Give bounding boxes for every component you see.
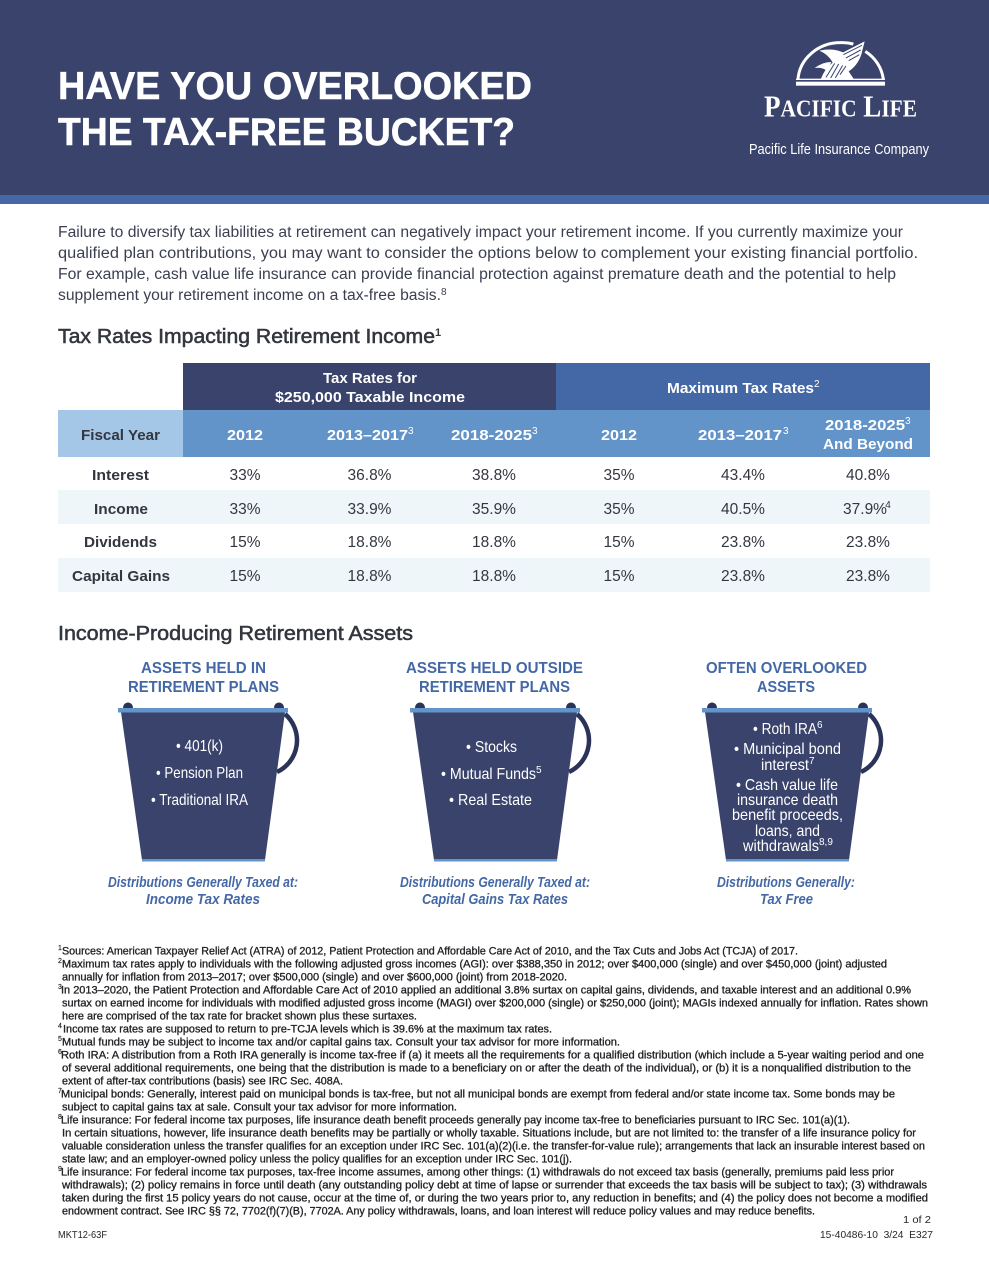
heading: tax rates: 1 (435, 327, 441, 339)
table header: maximum tax rates: Maximum Tax Rates (667, 380, 814, 397)
panel heading (128, 660, 279, 696)
table header: fiscal years (58, 410, 930, 457)
tax treatment caption (108, 874, 298, 908)
row: interest (92, 467, 890, 484)
bucket list: • Pension Plan (156, 765, 243, 782)
row: income: Income (94, 501, 148, 518)
footnotes: surtax on earned income for individuals with modified adjusted gross income (MAGI) over $200,000 (single) or $250,000 (joint); MAGIs indexed annually for inflation. Rates shown (62, 998, 928, 1010)
row: dividends (84, 534, 890, 551)
table header: fiscal years: 2013–2017 (698, 427, 782, 444)
row: dividends: 18.8% (472, 534, 516, 551)
title: THE TAX-FREE BUCKET? (58, 111, 515, 154)
heading: retirement assets: Income-Producing Retirement Assets (58, 623, 413, 645)
icon: bucket (410, 702, 589, 862)
footnotes: 2 (58, 958, 62, 965)
row: income: 40.5% (721, 501, 765, 518)
company name: Pacific Life Insurance Company (749, 142, 930, 158)
intro paragraph: For example, cash value life insurance can provide financial protection against premature death and the potential to help (58, 266, 896, 283)
footnotes: In 2013–2020, the Patient Protection and Affordable Care Act of 2010 applied an additional 3.8% surtax on capital gains, dividends, and taxable interest and an additional 0.9% (61, 984, 912, 996)
table header: fiscal years: 2013–2017 (327, 427, 408, 444)
row: capital gains: Capital Gains (72, 568, 170, 585)
panel heading: ASSETS (757, 679, 815, 696)
row: interest: 33% (229, 467, 261, 484)
footnotes: 8 (58, 1114, 62, 1121)
row: interest: 35% (603, 467, 635, 484)
bucket list: withdrawals (742, 838, 819, 855)
document code: MKT12-63F (58, 1229, 107, 1241)
footnotes: state law; and an employer-owned policy unless the policy qualifies for an exception under IRC Sec. 101(j). (62, 1154, 572, 1166)
row: income (58, 490, 930, 524)
row: income: 35.9% (472, 501, 516, 518)
heading: tax rates: Tax Rates Impacting Retirement Income (58, 326, 435, 348)
footnotes: of several additional requirements, one being that the distribution is made to a beneficiary on or after the death of the individual), or (b) it is a nonqualified distribution to the (62, 1062, 911, 1074)
tax treatment caption: Tax Free (760, 891, 813, 908)
table header: fiscal years: 2018-2025 (451, 427, 532, 444)
footnotes: 6 (58, 1049, 62, 1056)
intro paragraph: Failure to diversify tax liabilities at retirement can negatively impact your retirement income. If you currently maximize your (58, 224, 903, 241)
row: dividends: 23.8% (846, 534, 890, 551)
panel heading (406, 660, 583, 696)
intro paragraph: qualified plan contributions, you may want to consider the options below to complement your existing financial portfolio. (58, 245, 918, 262)
table header: fiscal years: 2012 (227, 427, 263, 444)
footnotes: Maximum tax rates apply to individuals with the following adjusted gross incomes (AGI): over $388,350 in 2012; over $400,000 (single) and over $450,000 (joint) adjusted (62, 958, 887, 970)
table header: fiscal years: Fiscal Year (81, 427, 160, 444)
panel heading: RETIREMENT PLANS (128, 679, 279, 696)
bucket list: interest (761, 757, 810, 774)
row: capital gains: 18.8% (472, 568, 516, 585)
bucket list (441, 739, 542, 809)
row: dividends: Dividends (84, 534, 157, 551)
bucket list: 7 (809, 756, 815, 767)
footnotes: 7 (58, 1088, 62, 1095)
bucket list: • Traditional IRA (151, 792, 248, 809)
bucket list: • Municipal bond (734, 741, 841, 758)
intro paragraph: supplement your retirement income on a tax-free basis. (58, 287, 441, 304)
row: income: 33% (229, 501, 261, 518)
table header: maximum tax rates: 2 (814, 379, 820, 390)
footnotes: annually for inflation from 2013–2017; over $500,000 (single) and over $600,000 (joint) from 2018-2020. (62, 972, 567, 984)
footnotes: Municipal bonds: Generally, interest paid on municipal bonds is tax-free, but not all municipal bonds are exempt from federal and/or state income tax. Some bonds may be (61, 1088, 895, 1100)
row: dividends: 23.8% (721, 534, 765, 551)
bucket list: • Stocks (466, 739, 517, 756)
footnotes: 4 (58, 1023, 62, 1030)
footnotes: here are comprised of the tax rate for bracket shown plus these surtaxes. (62, 1010, 417, 1022)
table header: fiscal years: 3 (532, 426, 538, 437)
row: interest: 43.4% (721, 467, 765, 484)
row: interest: Interest (92, 467, 149, 484)
row: capital gains (58, 558, 930, 592)
row: capital gains: 15% (603, 568, 635, 585)
row: income: 35% (603, 501, 635, 518)
table header: tax rates for $250,000: $250,000 Taxable Income (275, 389, 465, 406)
footnotes: Life insurance: For federal income tax purposes, life insurance death benefit proceeds generally pay income tax-free to beneficiaries pursuant to IRC Sec. 101(a)(1). (61, 1114, 850, 1126)
bucket list: insurance death (737, 792, 838, 809)
form number: 15-40486-10 3/24 E327 (820, 1229, 933, 1241)
footnotes: Life insurance: For federal income tax purposes, tax-free income assumes, among other things: (1) withdrawals do not exceed tax basis (generally, premiums paid less prior (61, 1166, 894, 1178)
bucket list: • 401(k) (176, 738, 223, 755)
footnotes (58, 945, 928, 1218)
footnotes: Income tax rates are supposed to return to pre-TCJA levels which is 39.6% at the maximum tax rates. (63, 1024, 552, 1036)
panel heading (706, 660, 867, 696)
row: capital gains: 23.8% (721, 568, 765, 585)
row: income: 37.9% (843, 501, 887, 518)
tax treatment caption: Distributions Generally: (717, 874, 855, 891)
header banner (0, 0, 989, 204)
footnotes: extent of after-tax contributions (basis) see IRC Sec. 408A. (62, 1076, 343, 1088)
row: interest: 40.8% (846, 467, 890, 484)
footnotes: taken during the first 15 policy years do not cause, occur at the time of, or during the two years prior to, any reduction in benefits; and (4) the policy does not become a modified (62, 1192, 928, 1204)
tax treatment caption: Capital Gains Tax Rates (422, 891, 568, 908)
panel heading: ASSETS HELD IN (141, 660, 266, 677)
footnotes: withdrawals); (2) policy remains in force until death (any outstanding policy debt at time of lapse or surrender that exceeds the tax basis will be subject to tax); (3) withdrawals (61, 1180, 927, 1192)
logo: Pacific Life whale (764, 41, 917, 124)
footnotes: Sources: American Taxpayer Relief Act (ATRA) of 2012, Patient Protection and Affordable Care Act of 2010, and the Tax Cuts and Jobs Act (TCJA) of 2017. (62, 946, 798, 958)
panel heading: OFTEN OVERLOOKED (706, 660, 867, 677)
table header: fiscal years: 2012 (601, 427, 637, 444)
row: capital gains: 15% (229, 568, 261, 585)
table header: tax rates for $250,000 (183, 363, 556, 410)
footnotes: 9 (58, 1166, 62, 1173)
table header: fiscal years: 3 (408, 426, 414, 437)
bucket list: • Roth IRA (753, 721, 817, 738)
footnotes: Mutual funds may be subject to income tax and/or capital gains tax. Consult your tax advisor for more information. (62, 1036, 620, 1048)
page number: 1 of 2 (903, 1214, 931, 1226)
bucket list: • Cash value life (736, 777, 838, 794)
bucket list: • Mutual Funds (441, 766, 536, 783)
table header: fiscal years: And Beyond (823, 436, 913, 453)
table header: fiscal years: 3 (783, 426, 789, 437)
logo: Pacific Life whale: PACIFIC LIFE (764, 88, 917, 124)
intro paragraph (58, 224, 918, 304)
row: interest: 36.8% (348, 467, 392, 484)
table header: fiscal years: 3 (905, 416, 911, 427)
tax treatment caption: Distributions Generally Taxed at: (108, 874, 298, 891)
bucket list: • Real Estate (449, 792, 532, 809)
row: capital gains: 23.8% (846, 568, 890, 585)
bucket list (151, 738, 248, 809)
bucket list: benefit proceeds, (732, 807, 843, 824)
tax treatment caption (717, 874, 855, 908)
panel heading: ASSETS HELD OUTSIDE (406, 660, 583, 677)
row: income: 33.9% (348, 501, 392, 518)
footnotes: 5 (58, 1036, 62, 1043)
panel: assets held outside retirement plans (400, 660, 590, 908)
row: income: 4 (885, 500, 891, 511)
row: capital gains: 18.8% (348, 568, 392, 585)
tax rates table (58, 363, 930, 592)
panel: assets held in retirement plans (108, 660, 298, 908)
footnotes: In certain situations, however, life insurance death benefits may be partially or wholly taxable. Situations include, but are not limited to: the transfer of a life insurance policy for (62, 1128, 916, 1140)
footnotes: 1 (58, 945, 62, 952)
tax treatment caption (400, 874, 590, 908)
footnotes: endowment contract. See IRC §§ 72, 7702(f)(7)(B), 7702A. Any policy withdrawals, loans, and loan interest will reduce policy values and may reduce benefits. (62, 1206, 815, 1218)
row: dividends: 15% (603, 534, 635, 551)
row: interest: 38.8% (472, 467, 516, 484)
bucket list: loans, and (755, 823, 820, 840)
title: HAVE YOU OVERLOOKED (58, 65, 532, 108)
title (58, 65, 532, 154)
panel heading: RETIREMENT PLANS (419, 679, 570, 696)
tax treatment caption: Distributions Generally Taxed at: (400, 874, 590, 891)
icon: bucket (702, 702, 881, 862)
footnotes: valuable consideration unless the transfer qualifies for an exception under IRC Sec. 101(a)(2)(i.e. the transfer-for-value rule); arrangements that lack an insurable interest based on (62, 1140, 925, 1152)
tax treatment caption: Income Tax Rates (146, 891, 260, 908)
table header: tax rates for $250,000: Tax Rates for (323, 370, 417, 387)
bucket list (732, 720, 843, 855)
bucket list: 5 (536, 765, 542, 776)
intro paragraph: 8 (441, 287, 447, 298)
row: dividends: 18.8% (348, 534, 392, 551)
bucket list: 8,9 (819, 837, 833, 848)
footnotes: subject to capital gains tax at sale. Consult your tax advisor for more information. (62, 1102, 457, 1114)
icon: bucket (118, 702, 297, 862)
footnotes: Roth IRA: A distribution from a Roth IRA generally is income tax-free if (a) it meets all the requirements for a qualified distribution (which include a 5-year waiting period and one (61, 1050, 924, 1062)
panel: often overlooked assets (702, 660, 881, 908)
footnotes: 3 (58, 984, 62, 991)
bucket list: 6 (817, 720, 823, 731)
table header: maximum tax rates (556, 363, 930, 410)
table header: fiscal years: 2018-2025 (825, 417, 905, 434)
row: dividends: 15% (229, 534, 261, 551)
